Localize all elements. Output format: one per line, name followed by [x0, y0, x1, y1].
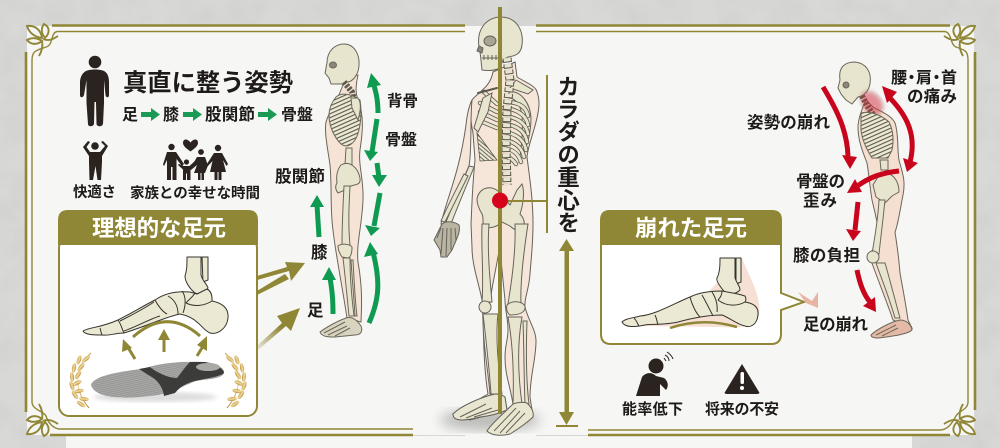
line: centre of gravity — [498, 7, 502, 414]
icon: right laurel — [225, 353, 248, 409]
labels: left body parts — [275, 92, 418, 320]
arrow: pelvis down — [372, 163, 387, 187]
title: 真直に整う姿勢 — [123, 70, 293, 97]
collapsed arch line — [670, 322, 737, 328]
labels: right body parts: 足の崩れ — [803, 315, 868, 334]
header: ideal foot: 理想的な足元 — [92, 216, 226, 241]
arrows: red collapse flow — [823, 86, 918, 312]
label: comfort: 快適さ — [73, 183, 116, 201]
header: ideal foot — [58, 210, 258, 245]
skull — [479, 17, 522, 71]
labels: right body parts: 姿勢の崩れ — [747, 113, 830, 132]
arch curve — [133, 322, 200, 337]
callout marker: pink wedge — [798, 292, 818, 308]
vertical heading: カラダの重心を — [554, 75, 580, 234]
labels: left body parts: 足 — [307, 302, 324, 320]
arrow: leg up — [364, 242, 378, 323]
labels: right body parts: 膝の負担 — [793, 246, 860, 265]
arrow: spine up — [367, 73, 381, 113]
panel: ideal foot — [58, 210, 258, 416]
arrow: posture down — [823, 87, 857, 169]
marker: centre of gravity — [492, 192, 508, 208]
arrow: knee up — [322, 267, 336, 314]
neck pain glow — [857, 87, 887, 119]
labels: left body parts: 股関節 — [275, 166, 325, 186]
rib cage — [474, 80, 533, 164]
feet — [453, 394, 507, 420]
flow: foot to pelvis: 膝 — [163, 106, 179, 124]
arrow: ideal foot to knee — [257, 262, 305, 295]
arrow: back double — [882, 86, 918, 172]
femurs and tibias — [482, 224, 492, 302]
label: lower efficiency: 能率低下 — [622, 400, 683, 418]
flow: foot to pelvis: 骨盤 — [281, 105, 313, 124]
panel: right frame — [536, 24, 975, 436]
icon: happy person — [83, 141, 108, 180]
arrow: knee to foot — [857, 270, 876, 312]
panel: collapsed foot — [600, 210, 804, 344]
pelvis — [477, 184, 524, 231]
guide line: from centre to label — [500, 75, 547, 233]
arrow: height double arrow — [556, 239, 578, 427]
illustration: insole — [91, 362, 224, 402]
illustration: foot bones with arch — [83, 257, 228, 335]
flow: foot to pelvis: 足 — [122, 107, 138, 124]
arrows: green posture flow — [310, 73, 387, 323]
icon: warning triangle — [725, 364, 759, 394]
arrow: pelvis tilt — [847, 171, 899, 193]
figure: left side skeleton — [320, 44, 363, 337]
flow: foot to pelvis — [122, 104, 313, 124]
icon: standing person — [80, 56, 109, 126]
labels: right body parts: 歪み — [803, 192, 837, 210]
header: collapsed foot — [600, 210, 782, 245]
label: future anxiety: 将来の不安 — [705, 400, 779, 418]
label: family time: 家族との幸せな時間 — [130, 184, 260, 202]
icon: headache person — [636, 352, 673, 396]
arm bones — [446, 166, 474, 224]
labels: right body parts: 腰・肩・首 — [891, 68, 957, 87]
arrow: ideal foot to sole — [258, 308, 300, 350]
shadow under feet — [440, 409, 540, 431]
labels: left body parts: 骨盤 — [385, 130, 417, 149]
labels: right body parts: の痛み — [907, 86, 957, 106]
icon: family with heart — [163, 140, 228, 180]
arrow: back down — [364, 119, 378, 161]
arrows: arch support — [122, 329, 207, 359]
figure: centre skeleton — [434, 17, 539, 435]
arrow: thigh down — [365, 193, 380, 236]
figure: right bent skeleton — [838, 62, 912, 338]
labels: left body parts: 膝 — [311, 243, 328, 262]
illustration: collapsed foot bones — [622, 258, 759, 327]
flow: foot to pelvis: 股関節 — [205, 104, 255, 124]
spine — [506, 58, 510, 185]
header: collapsed foot: 崩れた足元 — [635, 216, 747, 241]
arrow: hip up — [310, 195, 324, 237]
panel: left frame — [26, 24, 465, 436]
labels: right body parts: 骨盤の — [796, 172, 845, 191]
labels: right body parts — [747, 68, 957, 334]
arrow: thigh down — [846, 202, 861, 241]
labels: left body parts: 背骨 — [387, 92, 418, 110]
icon: left laurel — [68, 353, 91, 409]
